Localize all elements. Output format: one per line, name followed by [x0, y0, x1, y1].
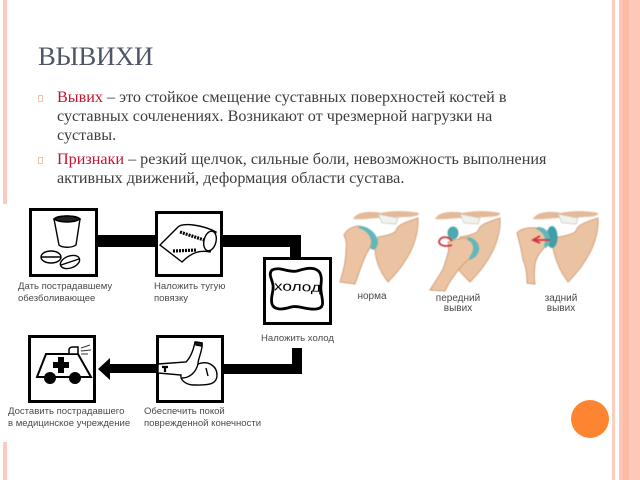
- text block: definition: Вывих – это стойкое смещение суставных поверхностей костей в: [57, 89, 506, 106]
- label: cold: холод: [274, 278, 322, 295]
- arrow: red: [533, 236, 550, 243]
- caption: immobilise: [144, 406, 261, 429]
- caption: posterior: [545, 293, 577, 314]
- arrow: red: [439, 237, 452, 246]
- caption: normal: норма: [357, 291, 387, 302]
- caption: bandage: [154, 281, 225, 304]
- caption: anterior: [436, 293, 480, 314]
- caption: anterior: передний: [436, 293, 480, 304]
- text block: definition: [38, 89, 506, 144]
- caption: immobilise: Обеспечить покой: [144, 406, 225, 417]
- icon: bandage roll: [160, 225, 218, 262]
- connector: step 1 to step 3: [97, 235, 301, 257]
- shoulder: anterior dislocation: [430, 211, 500, 291]
- arrow: step 3 to step 5 and step 4: [98, 348, 302, 380]
- icon: glass and pills: [41, 216, 81, 271]
- caption: anterior: вывих: [444, 303, 472, 314]
- caption: immobilise: поврежденной конечности: [144, 418, 261, 429]
- icon: ice pack: [270, 268, 323, 309]
- caption: painkiller: обезболивающее: [18, 293, 95, 304]
- box: immobilise limb: [158, 336, 222, 402]
- shoulder: normal: [340, 211, 419, 284]
- caption: painkiller: [18, 281, 112, 304]
- caption: posterior: задний: [545, 293, 577, 304]
- caption: transport: в медицинское учреждение: [8, 418, 130, 429]
- bullet: [38, 157, 43, 164]
- text block: definition: суставных сочленениях. Возникают от чрезмерной нагрузки на: [57, 108, 492, 125]
- text block: signs: [38, 151, 546, 187]
- caption: transport: Доставить пострадавшего: [8, 406, 124, 417]
- shoulder: posterior dislocation: [517, 211, 598, 284]
- bullet: [38, 95, 43, 102]
- caption: painkiller: Дать пострадавшему: [18, 281, 112, 292]
- caption: bandage: Наложить тугую: [154, 281, 225, 292]
- title: ВЫВИХИ: [38, 41, 153, 71]
- caption: posterior: вывих: [547, 303, 575, 314]
- text block: signs: активных движений, деформация области сустава.: [57, 170, 404, 187]
- box: bandage: [156, 212, 222, 276]
- text block: definition: суставы.: [57, 127, 116, 144]
- box: painkiller: [30, 210, 96, 276]
- decorative orange circle: [571, 400, 609, 438]
- box: cold: [264, 258, 330, 324]
- box: ambulance: [30, 336, 94, 402]
- caption: cold: Наложить холод: [261, 333, 334, 344]
- caption: bandage: повязку: [154, 293, 188, 304]
- caption: transport: [8, 406, 130, 429]
- icon: ambulance: [37, 345, 91, 384]
- text block: signs: Признаки – резкий щелчок, сильные боли, невозможность выполнения: [57, 151, 546, 168]
- icon: arm in sling: [158, 342, 217, 385]
